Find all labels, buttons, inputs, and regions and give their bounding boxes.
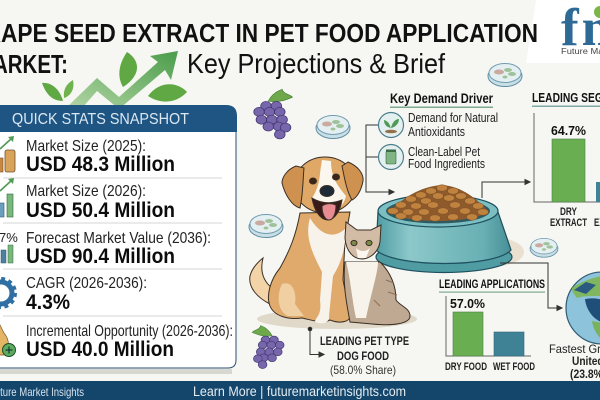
bar labels: DRY [560, 206, 577, 218]
icon: petri dish 2 [249, 214, 283, 238]
stat: forecast market value: Forecast Market Value (2036): [26, 230, 211, 247]
icon: gear [0, 278, 16, 308]
stat: CAGR [26, 275, 147, 314]
title: Key Projections & Brief [187, 48, 445, 79]
icon: bars with arrow [0, 178, 14, 217]
stat: forecast market value [26, 230, 211, 268]
globe: fastest growing [549, 272, 600, 381]
stat: market size 2026: Market Size (2026): [26, 183, 146, 200]
illustration: food bowl [376, 185, 524, 272]
icon: grapes bottom [252, 326, 284, 369]
bar: dry food: 57.0% [450, 296, 485, 311]
bar labels: DRY FOOD [445, 361, 487, 373]
icon: petri dish 3 [488, 64, 522, 86]
connector arrow [308, 327, 324, 357]
icon: coins [0, 136, 15, 172]
driver text 1: Demand for Natural [408, 111, 498, 125]
stat: CAGR: 4.3% [26, 291, 70, 314]
globe text [549, 342, 600, 381]
icon: grapes top [254, 89, 292, 139]
panel shadow [0, 369, 232, 374]
arrow: bowl to leading segment [482, 180, 530, 198]
leading pet type callout: DOG FOOD [337, 349, 389, 363]
stat: CAGR: CAGR (2026-2036): [26, 275, 147, 292]
arrow: bowl to globe [500, 263, 562, 310]
stat: market size 2026 [26, 183, 175, 222]
bar: wet food [494, 332, 524, 356]
stat: incremental opportunity [26, 323, 233, 361]
leading pet type callout [308, 327, 409, 377]
icon: petri dish 1 [316, 116, 350, 138]
heading: LEADING APPLICATIONS [439, 277, 545, 291]
chart: leading segment [532, 90, 600, 229]
connector arrow [366, 125, 394, 194]
icon: petri dish 4 [530, 238, 558, 257]
cat [344, 222, 410, 325]
logo: Future Market Insights [526, 0, 600, 63]
driver text 1: Antioxidants [408, 125, 465, 139]
panel header [0, 105, 237, 132]
driver text 2: Clean-Label Pet [408, 145, 480, 159]
title [0, 18, 538, 79]
stat: market size 2025: Market Size (2025): [26, 138, 146, 155]
dog [250, 157, 363, 323]
footer bar: Learn More | futuremarketinsights.com [193, 384, 406, 399]
panel header: QUICK STATS SNAPSHOT [12, 111, 189, 128]
driver text 1 [408, 111, 498, 139]
icon: percent bars [0, 230, 18, 263]
footer bar [0, 381, 600, 400]
panel: quick stats snapshot [0, 105, 237, 374]
stat: incremental opportunity: USD 40.0 Million [26, 338, 174, 361]
bar labels [550, 206, 600, 229]
bar: liquid extract [596, 182, 600, 202]
stat: incremental opportunity: Incremental Opportunity (2026-2036): [26, 323, 233, 340]
panel body [0, 125, 236, 368]
icon: growth arrow with leaves [42, 51, 187, 109]
icon: jar [378, 144, 404, 170]
stat: forecast market value: USD 90.4 Million [26, 245, 175, 268]
icon: sprout [378, 112, 404, 138]
bar labels [445, 361, 535, 373]
illustration: dog and cat [250, 157, 417, 329]
bar labels: WET FOOD [493, 361, 535, 373]
stat: market size 2026: USD 50.4 Million [26, 199, 175, 222]
stat: market size 2025 [26, 138, 175, 176]
driver text 2 [408, 145, 485, 171]
chart: leading applications [439, 277, 545, 373]
leading pet type callout: LEADING PET TYPE [320, 334, 409, 348]
stat: market size 2025: USD 48.3 Million [26, 153, 175, 176]
kibble [388, 185, 489, 221]
leading pet type callout: (58.0% Share) [330, 363, 396, 377]
bar: dry extract: 64.7% [551, 124, 586, 138]
driver text 2: Food Ingredients [408, 157, 485, 171]
key demand driver [366, 91, 498, 194]
heading: Key Demand Driver [390, 91, 494, 106]
icon: money bag with plus [0, 323, 16, 356]
